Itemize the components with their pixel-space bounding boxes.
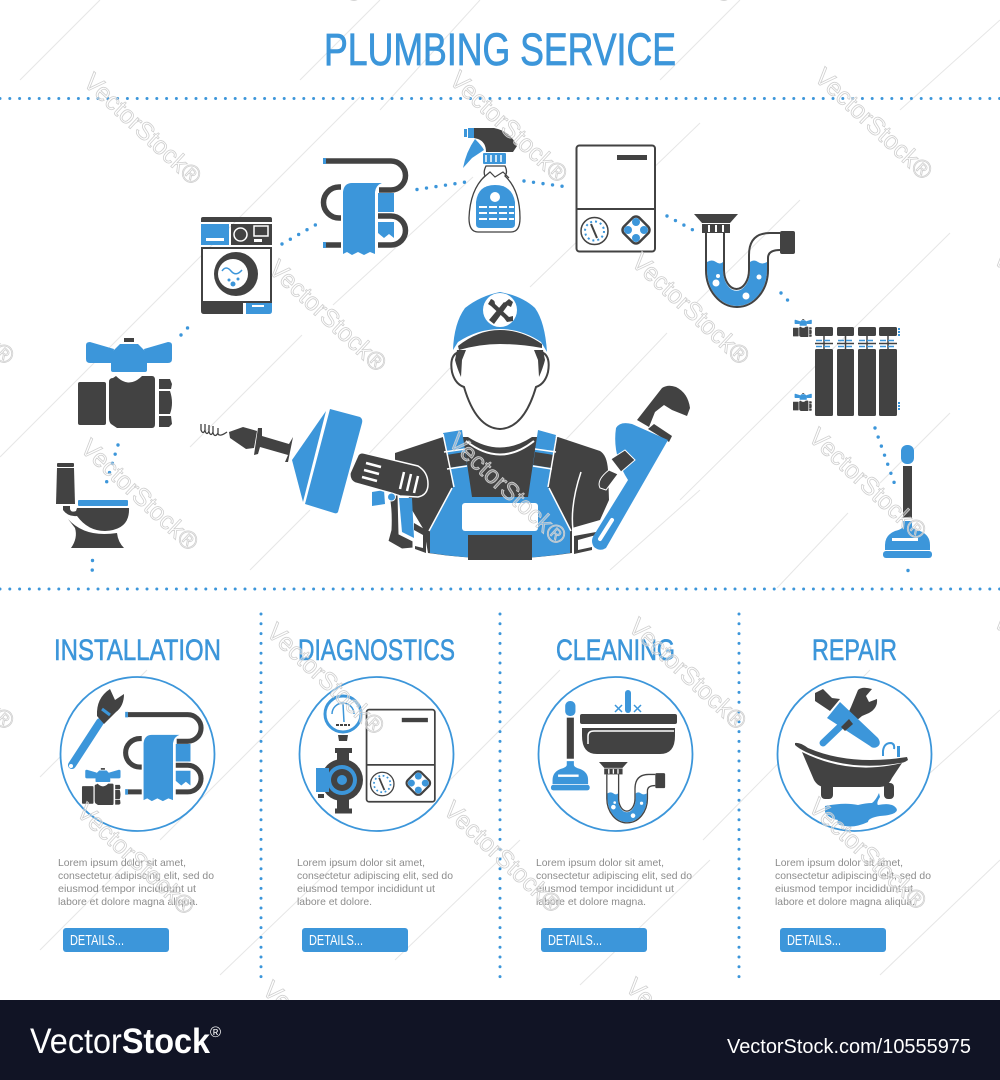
title: PLUMBING SERVICE <box>324 24 676 75</box>
footer logo: VectorStock <box>30 1022 210 1061</box>
description: consectetur adipiscing elit, sed do <box>297 870 453 882</box>
details button: DETAILS... <box>787 932 841 949</box>
panel: diagnostics <box>297 634 455 952</box>
watermarks: VectorStock® <box>75 434 204 557</box>
icon: ball valve <box>78 338 172 428</box>
icon: pipe wrench <box>592 386 690 550</box>
icon: spray bottle <box>463 128 520 232</box>
head <box>451 350 549 429</box>
illustration circle <box>60 677 214 831</box>
icon: sink trap <box>694 214 795 307</box>
watermarks: VectorStock® <box>803 423 932 546</box>
vertical dotted dividers <box>261 614 739 980</box>
illustration circle <box>538 677 692 831</box>
details button <box>780 928 886 952</box>
icon: radiator <box>793 319 899 416</box>
description: Lorem ipsum dolor sit amet, <box>297 857 425 869</box>
description: eiusmod tempor incididunt ut <box>536 883 674 895</box>
description: eiusmod tempor incididunt ut <box>775 883 913 895</box>
footer bar <box>0 1000 1000 1080</box>
watermarks: VectorStock® <box>438 796 567 919</box>
description <box>775 857 931 908</box>
panel: cleaning <box>536 634 692 952</box>
description: eiusmod tempor incididunt ut <box>297 883 435 895</box>
heading: INSTALLATION <box>54 634 221 667</box>
description: consectetur adipiscing elit, sed do <box>58 870 214 882</box>
description <box>58 857 214 908</box>
description: labore et dolore magna. <box>536 896 646 908</box>
description: consectetur adipiscing elit, sed do <box>775 870 931 882</box>
description: labore et dolore. <box>297 896 372 908</box>
watermarks: VectorStock® <box>444 66 573 189</box>
plumber figure <box>201 292 690 560</box>
icon: drain auger <box>201 409 362 513</box>
watermarks: VectorStock® <box>809 63 938 186</box>
details button <box>302 928 408 952</box>
top dotted divider <box>0 97 1000 100</box>
description: eiusmod tempor incididunt ut <box>58 883 196 895</box>
watermarks: VectorStock® <box>803 793 932 916</box>
description: consectetur adipiscing elit, sed do <box>536 870 692 882</box>
illustration circle <box>778 677 932 831</box>
watermarks: VectorStock® <box>626 248 755 371</box>
icon: heated towel rail <box>323 158 406 255</box>
heading: DIAGNOSTICS <box>298 634 455 667</box>
details button <box>63 928 169 952</box>
icon: plunger <box>883 445 932 558</box>
registered mark: ® <box>210 1024 221 1041</box>
description: Lorem ipsum dolor sit amet, <box>536 857 664 869</box>
heading: REPAIR <box>812 634 897 667</box>
cap <box>453 292 547 352</box>
icon: washing machine <box>201 217 272 314</box>
lower arm bands <box>414 523 596 554</box>
illustration circle <box>300 677 454 831</box>
description: Lorem ipsum dolor sit amet, <box>58 857 186 869</box>
watermarks: VectorStock® <box>443 428 572 551</box>
description: labore et dolore magna aliqua. <box>775 896 915 908</box>
details button: DETAILS... <box>309 932 363 949</box>
details button: DETAILS... <box>548 932 602 949</box>
details button: DETAILS... <box>70 932 124 949</box>
icon: boiler <box>576 146 655 252</box>
watermarks: VectorStock® <box>263 255 392 378</box>
description: labore et dolore magna aliqua. <box>58 896 198 908</box>
panel: repair <box>775 634 932 952</box>
torso <box>395 437 609 558</box>
icon: cordless drill <box>350 453 428 549</box>
watermarks: VectorStock® <box>623 613 752 736</box>
icon: toilet <box>56 463 129 548</box>
middle dotted divider <box>0 588 1000 590</box>
dotted connectors between icons <box>92 181 908 580</box>
overalls <box>429 430 581 560</box>
heading: CLEANING <box>556 634 675 667</box>
watermarks: VectorStock® <box>78 68 207 191</box>
panel: installation <box>54 634 221 952</box>
watermarks: VectorStock® <box>71 798 200 921</box>
footer url: VectorStock.com/10555975 <box>727 1036 971 1058</box>
description <box>536 857 692 908</box>
details button <box>541 928 647 952</box>
watermarks: VectorStock® <box>261 618 390 741</box>
description: Lorem ipsum dolor sit amet, <box>775 857 903 869</box>
description <box>297 857 453 908</box>
